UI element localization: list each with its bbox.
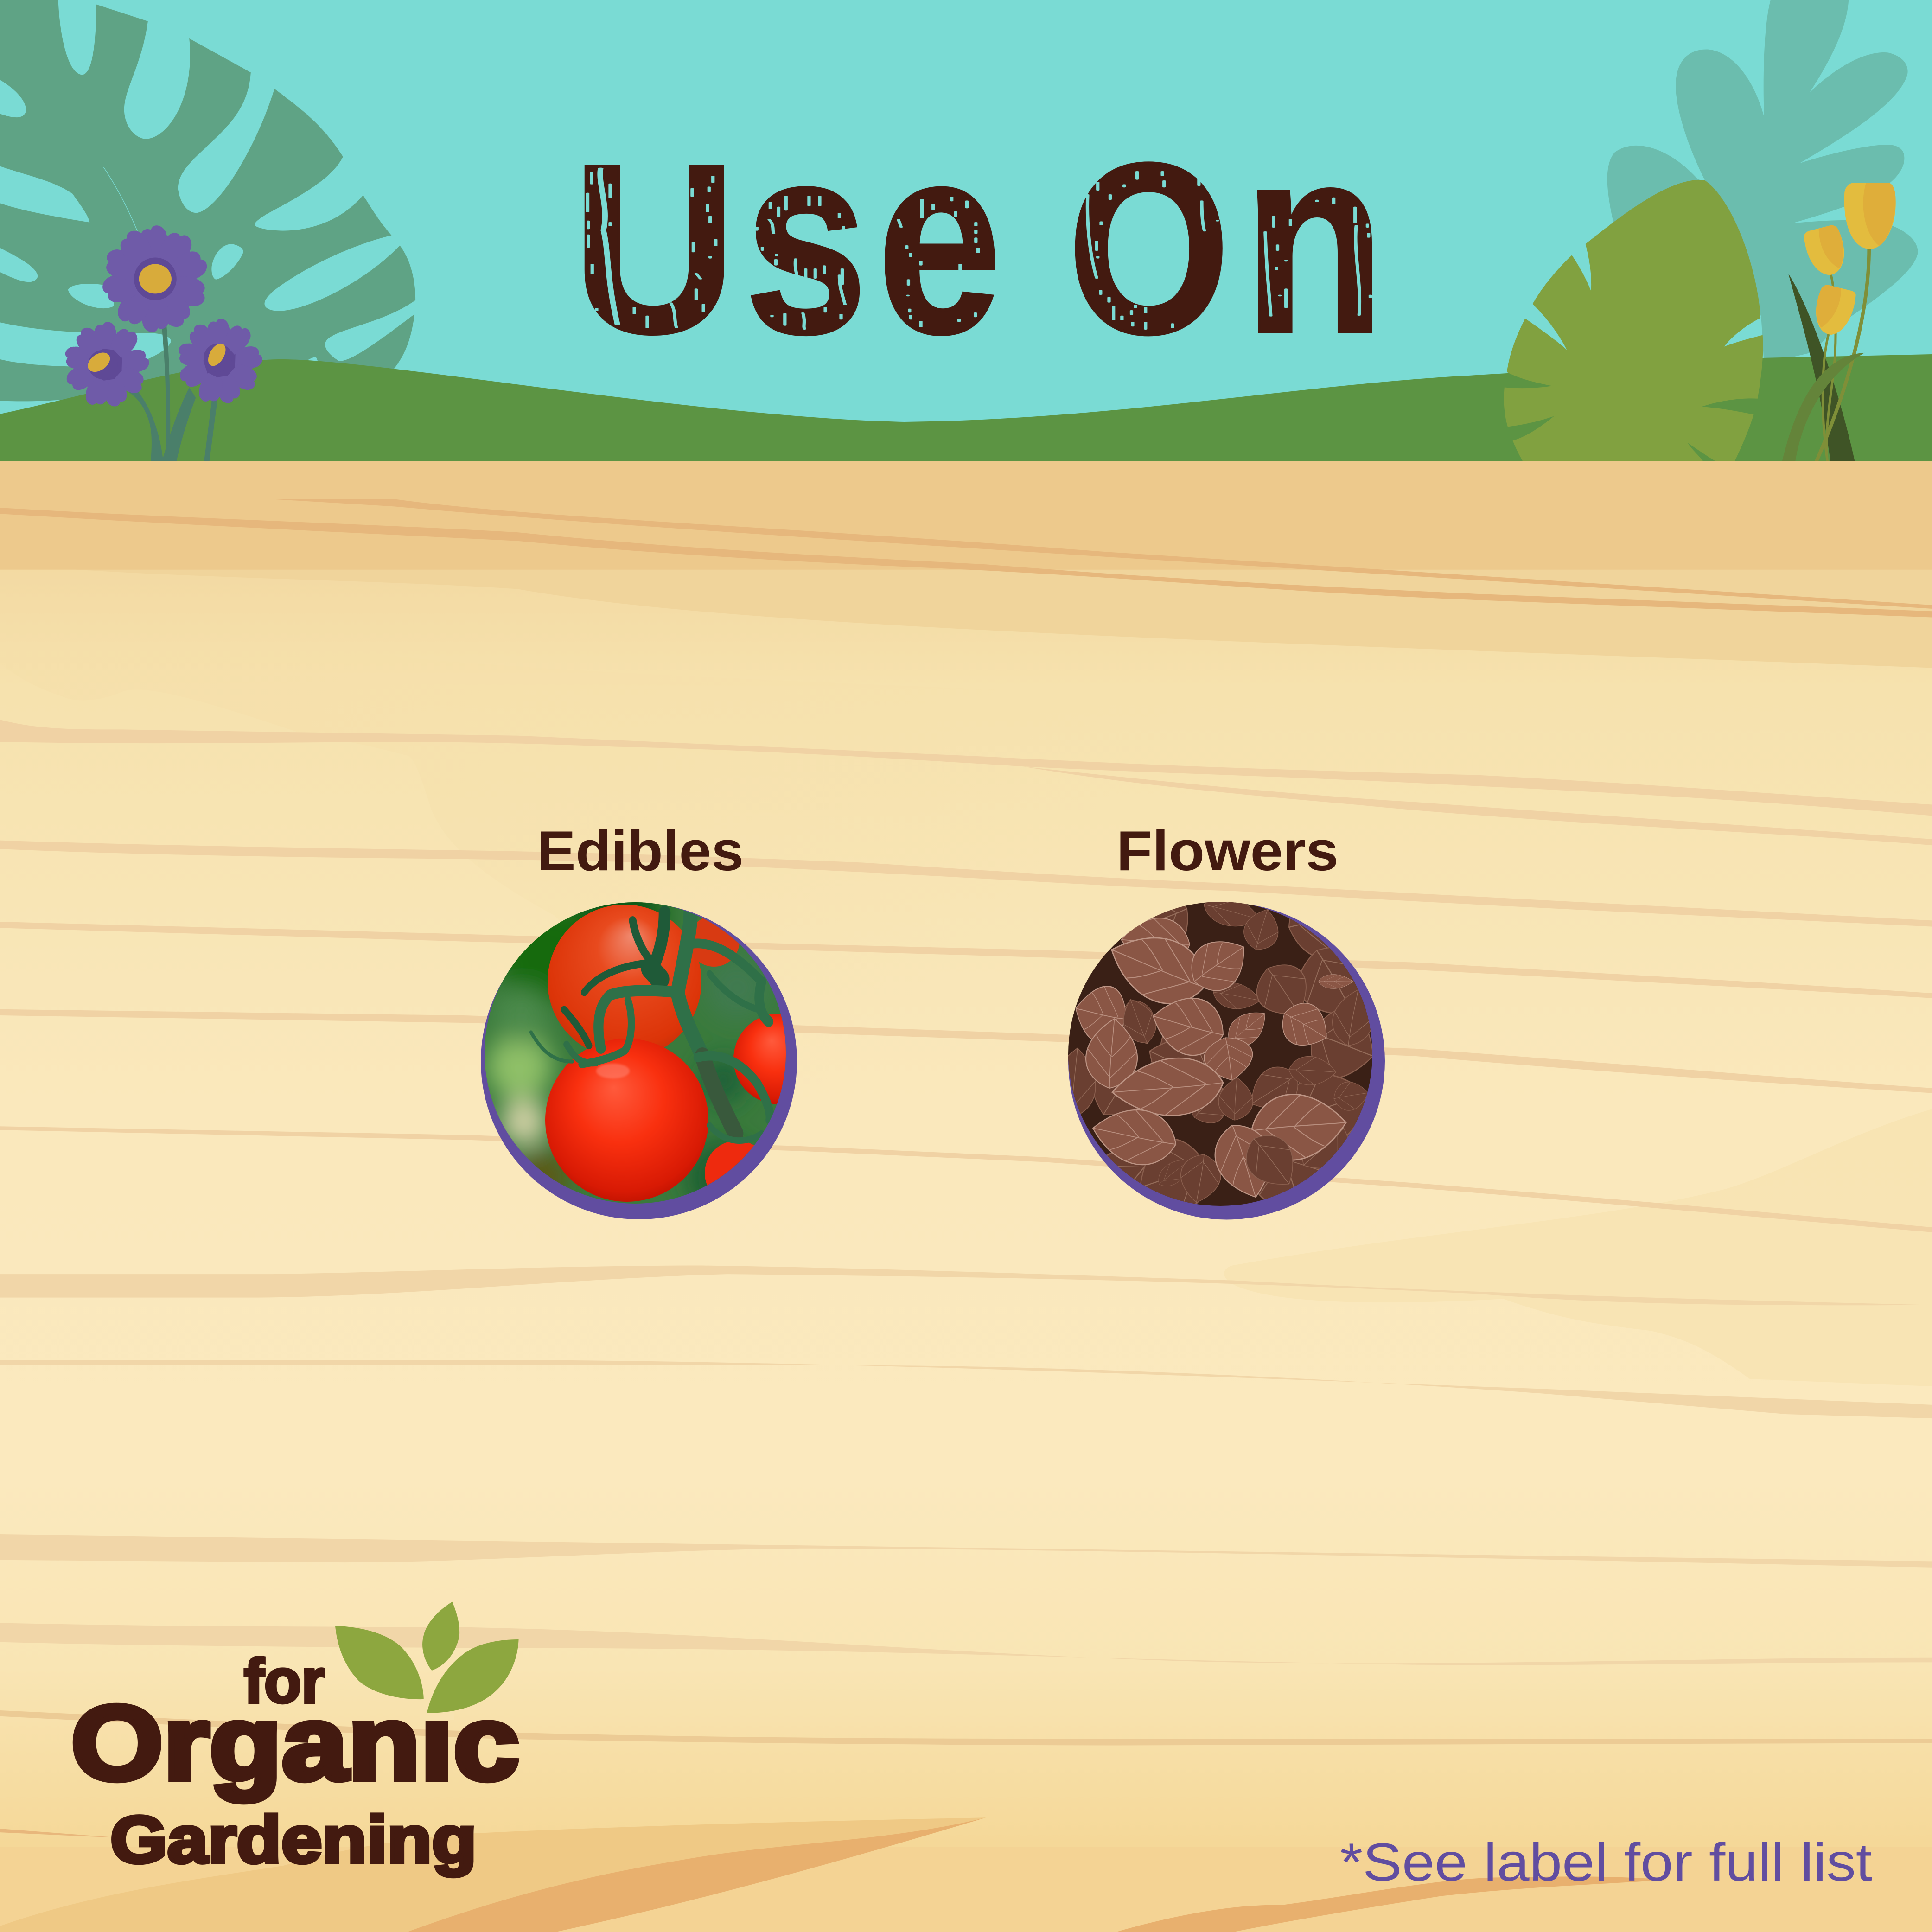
flower: large top xyxy=(100,225,210,333)
flower: lower left xyxy=(62,322,150,409)
logo leaves xyxy=(335,1602,519,1713)
front green leaf xyxy=(1504,180,1763,463)
title: Use On: U xyxy=(572,114,737,383)
title: Use On: O xyxy=(1068,113,1230,384)
tulip stems xyxy=(1816,249,1869,463)
grain lines xyxy=(0,499,1932,618)
tomato: right xyxy=(733,1014,786,1104)
tomato: behind top right xyxy=(694,918,740,967)
logo text: Organic xyxy=(71,1684,519,1802)
logo text: Gardening xyxy=(110,1803,477,1877)
tomato stems and sepals xyxy=(531,912,770,1141)
tulip: large xyxy=(1844,183,1896,249)
title: Use On: s xyxy=(745,90,867,389)
logo: for Organic Gardening xyxy=(71,1602,519,1877)
title distressed texture xyxy=(588,168,1370,329)
logo text xyxy=(71,1646,519,1877)
dark grass blade xyxy=(1788,274,1855,463)
panel: Edibles xyxy=(481,829,797,1219)
illustration: pale back leaves, right xyxy=(1607,0,1918,363)
tomato: upper xyxy=(548,905,701,1058)
tomato: large front xyxy=(545,1039,708,1202)
title: Use On: n xyxy=(1243,91,1385,388)
title: Use On: e xyxy=(877,89,1001,389)
wood plank background xyxy=(0,461,1932,1932)
illustration: monstera leaf, left xyxy=(0,0,415,401)
tulip: lower xyxy=(1816,285,1856,335)
sky background xyxy=(0,0,1932,464)
flower stems xyxy=(126,325,218,461)
lower wood tones xyxy=(0,1847,1932,1932)
purple circle frame xyxy=(481,903,797,1219)
purple circle frame xyxy=(1068,903,1385,1219)
illustration: green leaf and tulips, right xyxy=(1504,180,1896,463)
footnote: *See label for full list xyxy=(1340,1833,1872,1892)
illustration: purple flowers xyxy=(62,225,263,461)
heading: Edibles: Edibles xyxy=(537,819,744,882)
panel: Flowers xyxy=(1050,819,1385,1235)
title: Use On xyxy=(572,89,1385,389)
tomato: bottom right xyxy=(705,1142,754,1185)
tulip: medium xyxy=(1804,225,1844,275)
heading: Flowers: Flowers xyxy=(1116,819,1339,882)
curved grass blade xyxy=(1782,353,1865,463)
photo: brown foliage xyxy=(1050,875,1385,1235)
flower: lower right xyxy=(175,319,263,406)
logo text: for xyxy=(244,1646,325,1716)
photo: tomatoes on the vine xyxy=(485,902,786,1204)
illustration: green hill xyxy=(0,354,1932,464)
